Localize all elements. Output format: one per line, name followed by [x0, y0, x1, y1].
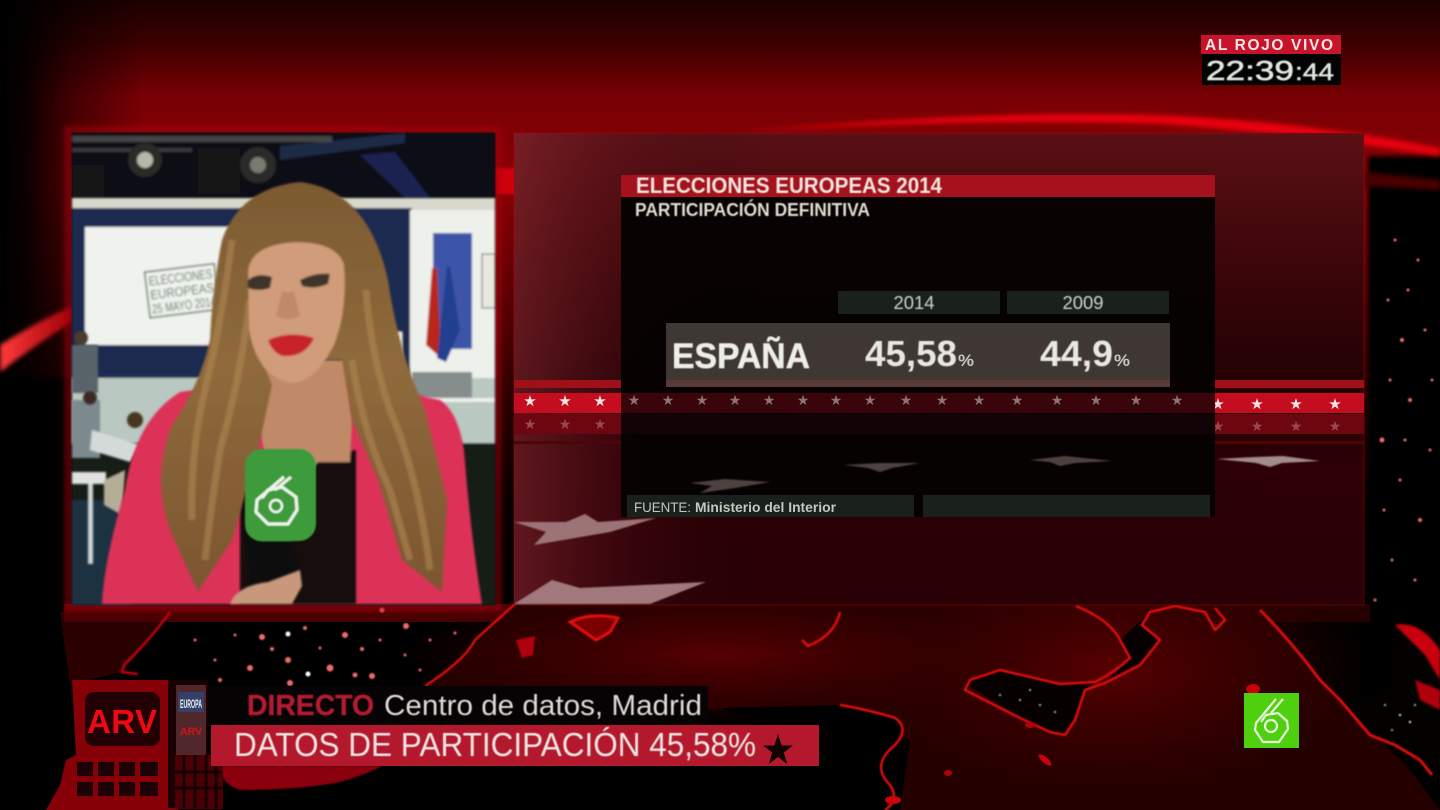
- panel: results backdrop with star bands: [514, 133, 1364, 605]
- heading band: election title: [621, 173, 1215, 198]
- stars: white stars on red band: ★: [1211, 396, 1225, 413]
- stars: dim row across table: ★: [696, 392, 708, 408]
- source bar: [627, 495, 1210, 517]
- small decorative star: right: [1217, 456, 1320, 467]
- stars: white stars on red band: ★: [1250, 396, 1264, 413]
- subheading: PARTICIPACIÓN DEFINITIVA: [635, 199, 870, 220]
- city lights: dotted sparkle field: [194, 238, 1434, 731]
- logo: ARV tower: ARV: [87, 703, 157, 740]
- stars: faded second row: ★: [594, 416, 606, 432]
- stars: white stars on red band: ★: [1328, 396, 1342, 413]
- reporter: dark top and neck: [240, 360, 356, 604]
- logo: Europa 2014 side tower: ARV: [180, 726, 203, 738]
- stars: dim row across table: ★: [900, 392, 912, 408]
- stars: dim row across table: ★: [1051, 392, 1063, 408]
- value: 2009 turnout: 44,9: [1040, 333, 1113, 374]
- stars: dim row across table: ★: [1090, 392, 1102, 408]
- percent sign: 2014: %: [958, 351, 974, 370]
- logo: Europa 2014 side tower: EUROPA: [180, 697, 202, 711]
- clock: Al Rojo Vivo time bug: [1201, 35, 1341, 86]
- stars: white stars on red band: ★: [558, 393, 572, 410]
- panel: live video of reporter: [64, 126, 502, 612]
- stage wall with election screen: ELECCIONES: [148, 266, 213, 289]
- stage wall with election screen: 25 MAYO 2014: [151, 294, 217, 316]
- stars: faded second row: ★: [1329, 418, 1341, 434]
- stars: faded second row: [524, 416, 1341, 434]
- logo: ARV tower: [46, 680, 178, 810]
- stars: faded second row: ★: [1251, 418, 1263, 434]
- data row: España: [666, 323, 1170, 387]
- stars: dim row across table: ★: [1130, 392, 1142, 408]
- stars: faded second row: ★: [559, 416, 571, 432]
- icon: black star: [763, 734, 793, 764]
- reporter: hand holding mic: [230, 570, 302, 604]
- column header: 2014: [838, 291, 1000, 314]
- stars: faded second row: ★: [524, 416, 536, 432]
- stars: dim row across table: [628, 392, 1183, 408]
- stars: dim row across table: ★: [830, 392, 842, 408]
- stars: dim row across table: ★: [973, 392, 985, 408]
- lower third: location line: [208, 686, 708, 726]
- source bar: Ministerio del Interior: [695, 499, 837, 515]
- reporter: long blonde-brown hair: [161, 182, 447, 592]
- hair strand highlights: [192, 240, 430, 570]
- value: 2014 turnout: 45,58: [865, 333, 957, 374]
- background workers at desks: [72, 331, 143, 564]
- stars: white stars on red band: ★: [523, 393, 537, 410]
- faint stars inside table: [690, 456, 1112, 493]
- panel: dark data table: [621, 173, 1215, 517]
- logo: La Sexta green bug: [1244, 693, 1299, 748]
- stars: faded second row: ★: [1290, 418, 1302, 434]
- clock: Al Rojo Vivo time bug: AL ROJO VIVO: [1205, 37, 1333, 54]
- clock: Al Rojo Vivo time bug: 22:39: [1206, 55, 1294, 86]
- stars: white stars on red band: ★: [593, 393, 607, 410]
- stars: dim row across table: ★: [628, 392, 640, 408]
- stage wall with election screen: [72, 198, 495, 605]
- stars: dim row across table: ★: [763, 392, 775, 408]
- studio ceiling and lighting rig: [72, 133, 495, 205]
- large decorative star: bottom left: [514, 580, 706, 604]
- heading band: election title: ELECCIONES EUROPEAS 2014: [636, 173, 943, 198]
- column header: 2009: [1007, 291, 1169, 314]
- map: red land under lower third: [222, 766, 382, 790]
- map: southern Europe coastline: [60, 540, 1440, 810]
- stars: faded second row: ★: [1212, 418, 1224, 434]
- stage wall with election screen: EUROPEAS: [149, 280, 215, 303]
- stars: dim row across table: ★: [864, 392, 876, 408]
- stars: white stars on red band: ★: [1289, 396, 1303, 413]
- stars: dim row across table: ★: [729, 392, 741, 408]
- reporter: face: [248, 242, 345, 383]
- stars: dim row across table: ★: [662, 392, 674, 408]
- stars: dim row across table: ★: [1171, 392, 1183, 408]
- column header: 2014: 2014: [894, 293, 934, 313]
- microphone with green cube: [245, 449, 316, 600]
- stars: dim row across table: ★: [797, 392, 809, 408]
- source bar: FUENTE:: [634, 499, 691, 515]
- reporter: pink jacket: [102, 380, 482, 604]
- large decorative star: lower left: [514, 514, 656, 545]
- percent sign: 2009: %: [1114, 351, 1130, 370]
- stars: white stars on red band: [523, 393, 1342, 413]
- country label: ESPAÑA: [672, 337, 810, 376]
- stars: dim row across table: ★: [1011, 392, 1023, 408]
- lower third: location line: DIRECTO: [247, 690, 374, 722]
- lower third: headline band: DATOS DE PARTICIPACIÓN 45,58%: [234, 726, 756, 763]
- column header: 2009: 2009: [1062, 293, 1104, 313]
- logo: Europa 2014 side tower: [168, 680, 223, 809]
- clock: Al Rojo Vivo time bug: :44: [1295, 59, 1334, 86]
- stars: dim row across table: ★: [936, 392, 948, 408]
- lower third: location line: Centro de datos, Madrid: [384, 690, 702, 722]
